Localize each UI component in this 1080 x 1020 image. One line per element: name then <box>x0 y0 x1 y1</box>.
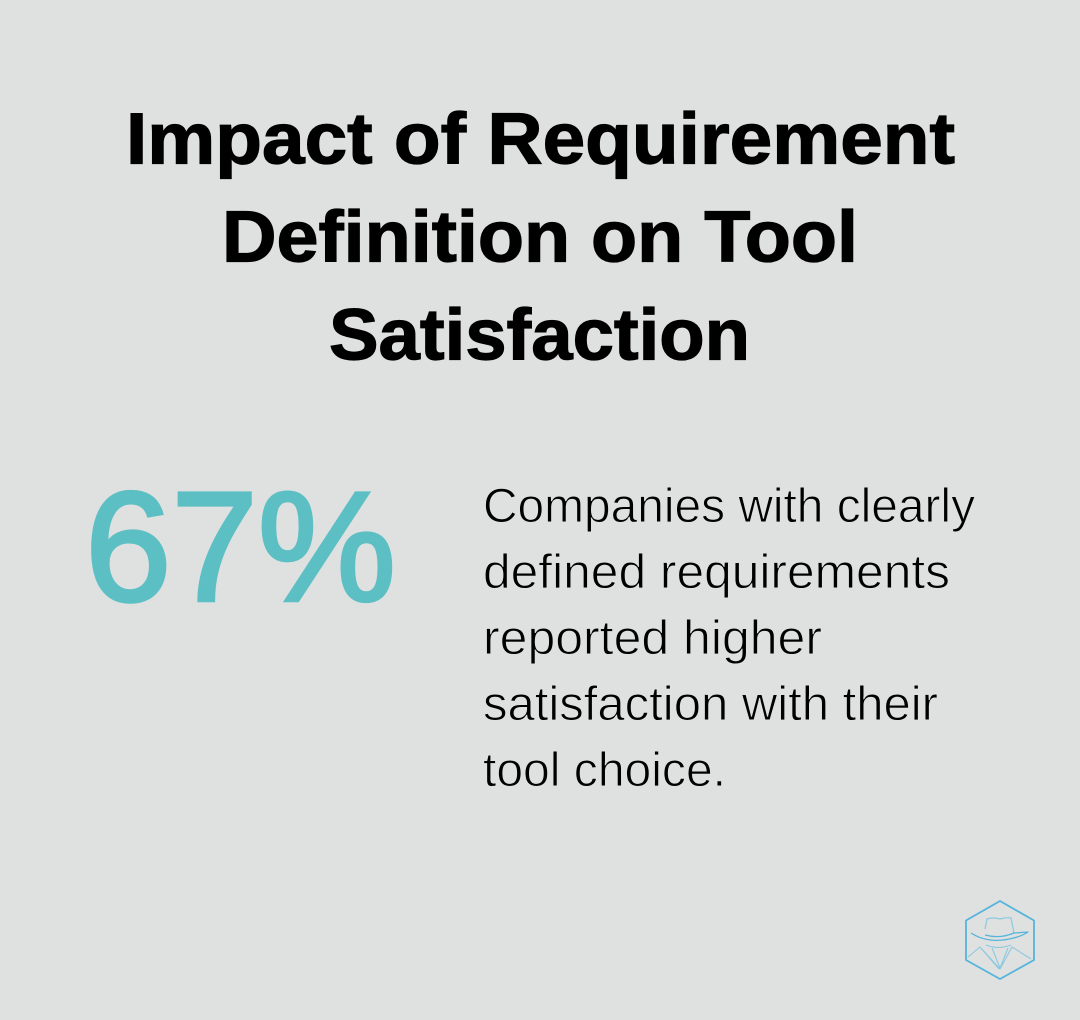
description text: tool choice. <box>483 744 726 797</box>
hat brim <box>971 932 1028 940</box>
description text: Companies with clearly <box>483 480 975 533</box>
hat crown <box>985 918 1014 933</box>
description text <box>483 480 975 797</box>
description text: defined requirements <box>483 546 950 599</box>
big statistic: 67%: 67% <box>85 460 396 634</box>
title: Impact of Requirement <box>126 100 955 180</box>
hexagon outline <box>966 901 1034 979</box>
coat collar <box>968 947 1031 969</box>
face line <box>986 945 1011 948</box>
description text: satisfaction with their <box>483 678 938 731</box>
title: Definition on Tool <box>222 198 858 278</box>
icon: hexagon logo with spy in hat <box>966 901 1034 979</box>
title <box>126 100 955 376</box>
title: Satisfaction <box>329 296 750 376</box>
description text: reported higher <box>483 612 822 665</box>
